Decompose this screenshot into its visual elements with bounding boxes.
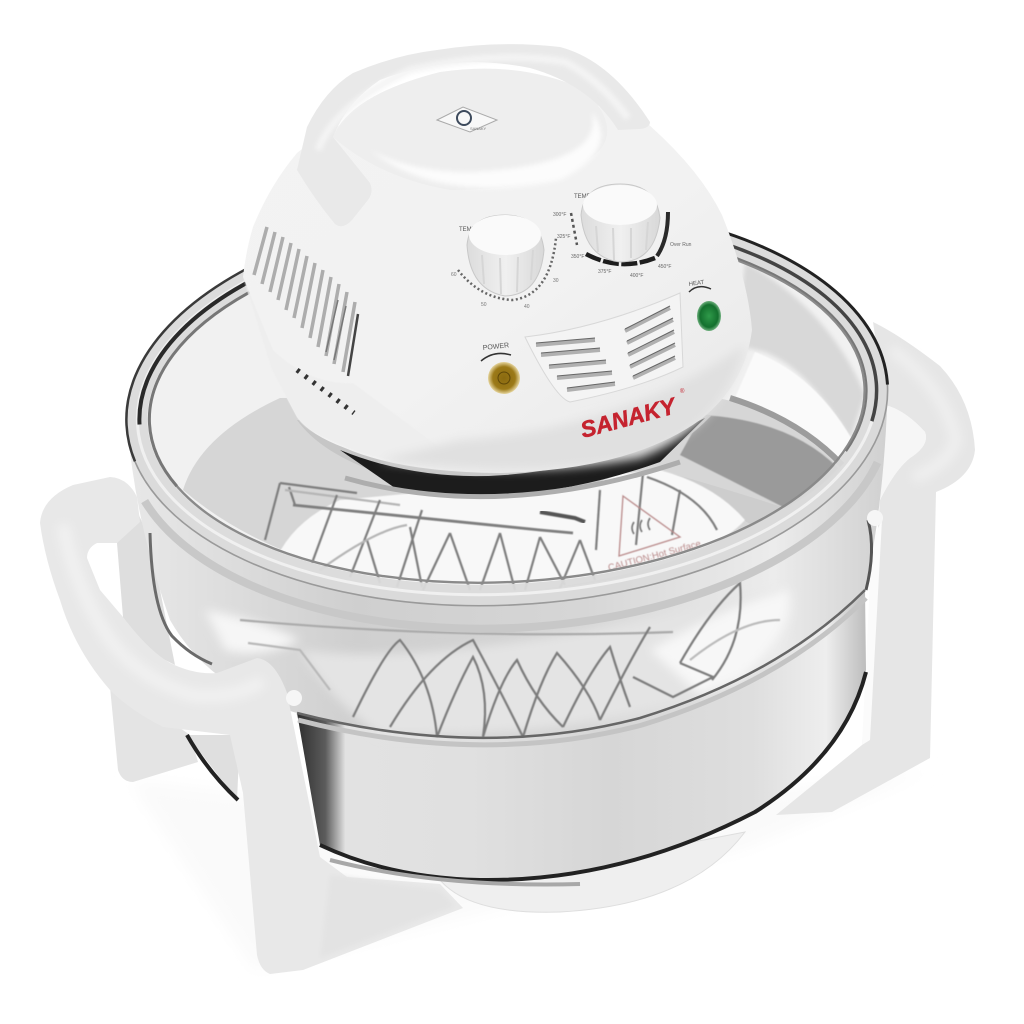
stand: left handle and front leg (40, 477, 883, 974)
carrying handle (297, 44, 650, 226)
heat indicator (688, 280, 721, 331)
top recess (333, 69, 607, 190)
side ridge (243, 277, 470, 470)
left dial scale: 40 (524, 304, 530, 310)
left dial scale: 50 (481, 302, 487, 308)
icon: small sticker (437, 107, 497, 132)
right dial scale: 375°F (598, 269, 611, 275)
dark top-right rim (116, 185, 898, 625)
stand: rear left leg and arm plane (110, 495, 198, 782)
steel pot (297, 590, 866, 884)
glass bowl: rim (116, 185, 899, 648)
right dial scale: 350°F (571, 254, 584, 260)
right dial scale: 400°F (630, 273, 643, 279)
glass bowl: lower body (128, 380, 888, 745)
stand: right handle (776, 322, 975, 815)
steel rim ring (297, 590, 865, 738)
power indicator (481, 342, 520, 394)
glass bowl: inside (128, 198, 886, 612)
right dial scale: TEMP (574, 194, 591, 200)
power indicator: POWER (482, 342, 510, 352)
lower rim bands (117, 208, 899, 648)
front vent panel (525, 293, 683, 402)
right dial scale: Over Run (670, 242, 692, 248)
reflection band (735, 262, 865, 440)
heat indicator: HEAT (688, 280, 705, 288)
base plate under the pot (440, 832, 745, 912)
lower dotted vent (297, 370, 354, 413)
caution sticker (607, 496, 702, 574)
dark top-left rim (116, 185, 898, 625)
floor of bowl (183, 395, 842, 592)
left dial scale: 60 (451, 272, 457, 278)
brand logo: SANAKY (578, 392, 681, 443)
right dial scale: 300°F (553, 212, 566, 218)
left dial scale (451, 227, 559, 310)
black lower support ring (187, 735, 240, 800)
right dial knob (581, 184, 660, 262)
lower rack (240, 583, 780, 737)
side vent (254, 227, 358, 376)
floor shadow (130, 770, 930, 970)
left dial knob (467, 215, 544, 296)
lower white tray (300, 590, 786, 735)
right dial scale: 325°F (557, 234, 570, 240)
brand logo: ® (680, 388, 685, 395)
dark reflection on right (680, 415, 838, 508)
upper wire rack (265, 473, 717, 590)
icon: small sticker: SANAKY (470, 126, 487, 131)
white tray (277, 470, 745, 592)
caution sticker: CAUTION:Hot Surface (607, 539, 702, 574)
right dial scale: 450°F (658, 264, 671, 270)
right dial scale (553, 194, 692, 279)
rack clasp (540, 512, 585, 522)
oven head: black collar (297, 415, 712, 498)
left dial scale: 30 (553, 278, 559, 284)
lower skirt shadow (380, 345, 745, 470)
oven head: housing (243, 44, 752, 473)
left dial scale: TEMP (459, 227, 476, 233)
